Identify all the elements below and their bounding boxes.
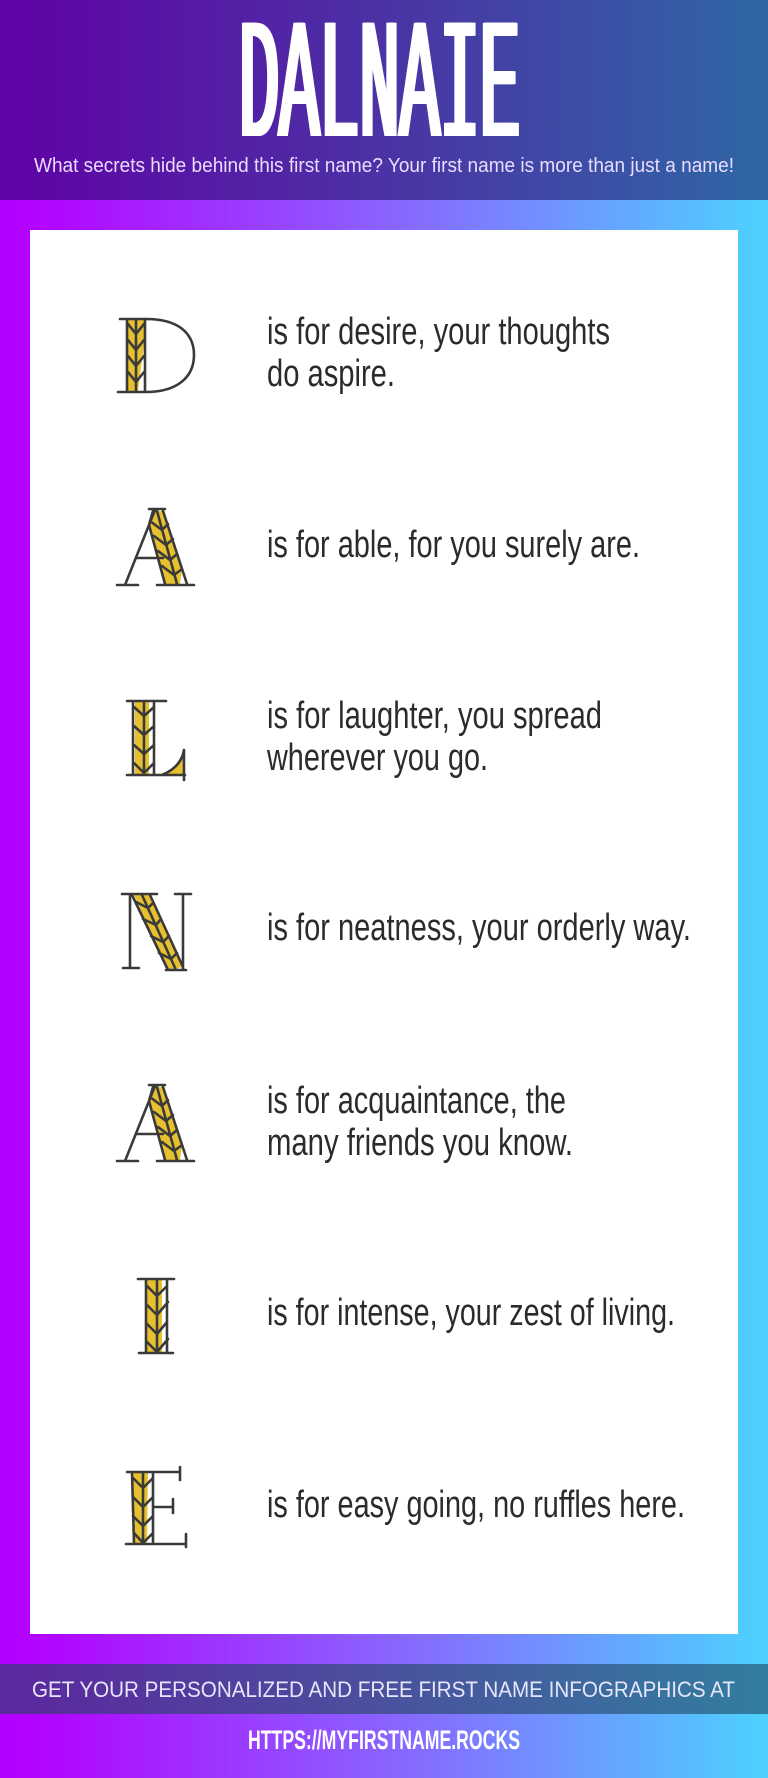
- subtitle: What secrets hide behind this first name? Your first name is more than just a name!: [34, 155, 734, 177]
- header band: [0, 0, 768, 200]
- icon: letter L: [127, 701, 185, 780]
- text: D line: [267, 311, 610, 395]
- icon: letter A second: [117, 1085, 194, 1161]
- icon: letter E: [126, 1467, 186, 1547]
- text: A second line: [267, 1080, 573, 1164]
- panel: white card: [30, 230, 738, 1634]
- footer band: [0, 1664, 768, 1714]
- icon: letter D: [118, 319, 194, 392]
- text: L line: wherever you go.: [266, 737, 488, 779]
- icon: letter N: [122, 894, 191, 970]
- text: D line: do aspire.: [267, 353, 395, 395]
- footer url: HTTPS://MYFIRSTNAME.ROCKS: [248, 1725, 520, 1755]
- text: A second line: is for acquaintance, the: [267, 1080, 566, 1122]
- text: A line: is for able, for you surely are.: [267, 524, 640, 566]
- text: D line: is for desire, your thoughts: [267, 311, 610, 353]
- text: L line: is for laughter, you spread: [267, 695, 602, 737]
- icon: letter I: [138, 1279, 174, 1353]
- icon: letter A: [117, 509, 194, 585]
- text: L line: [266, 695, 602, 779]
- text: A second line: many friends you know.: [267, 1122, 573, 1164]
